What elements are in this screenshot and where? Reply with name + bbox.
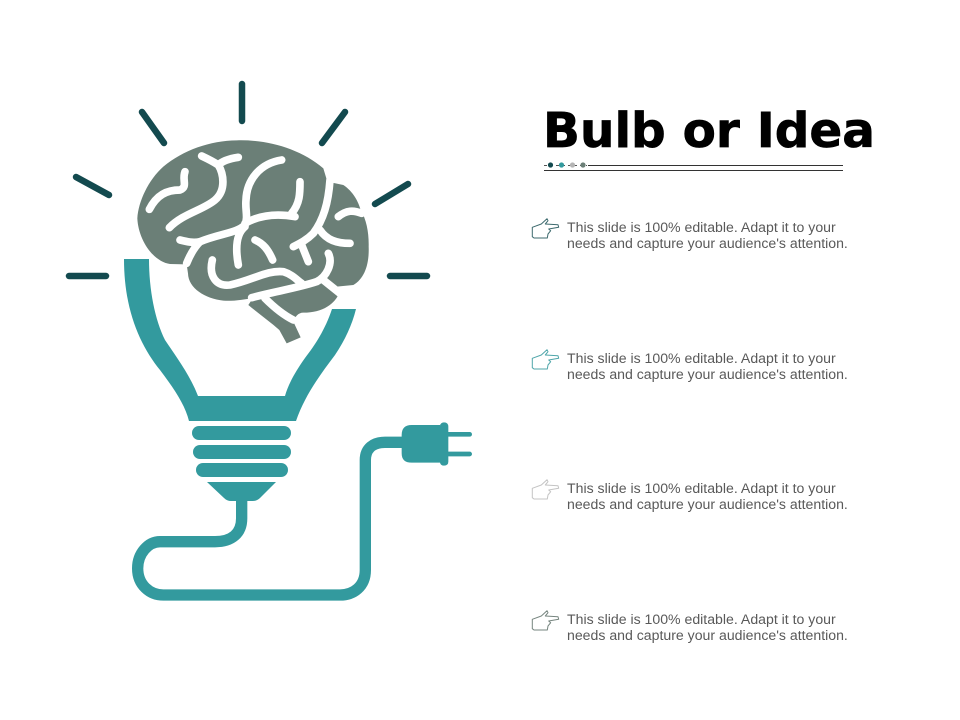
- icon: bulb screw rings and cone: [192, 426, 291, 501]
- icon: brain: [137, 140, 369, 343]
- item 2: [532, 350, 848, 382]
- icon: light rays: [69, 84, 427, 276]
- icon: pointing hand slate: [532, 611, 559, 630]
- text block 4: needs and capture your audience's attention.: [567, 627, 848, 643]
- text block 3: This slide is 100% editable. Adapt it to your: [567, 480, 836, 496]
- title: Bulb or Idea: [543, 103, 875, 159]
- text block 1: needs and capture your audience's attention.: [567, 235, 848, 251]
- text block 4: This slide is 100% editable. Adapt it to your: [567, 611, 836, 627]
- icon: power cord and plug: [138, 422, 470, 595]
- text block 2: This slide is 100% editable. Adapt it to your: [567, 350, 836, 366]
- title underline with dots: [544, 162, 843, 170]
- text block 2: needs and capture your audience's attention.: [567, 366, 848, 382]
- icon: pointing hand grey: [532, 480, 559, 499]
- item 1: [532, 219, 848, 251]
- item 3: [532, 480, 848, 512]
- item 4: [532, 611, 848, 643]
- icon: light bulb glass and base: [124, 259, 356, 421]
- icon: pointing hand teal: [532, 350, 559, 369]
- icon: pointing hand dark: [532, 219, 559, 238]
- text block 3: needs and capture your audience's attention.: [567, 496, 848, 512]
- text block 1: This slide is 100% editable. Adapt it to your: [567, 219, 836, 235]
